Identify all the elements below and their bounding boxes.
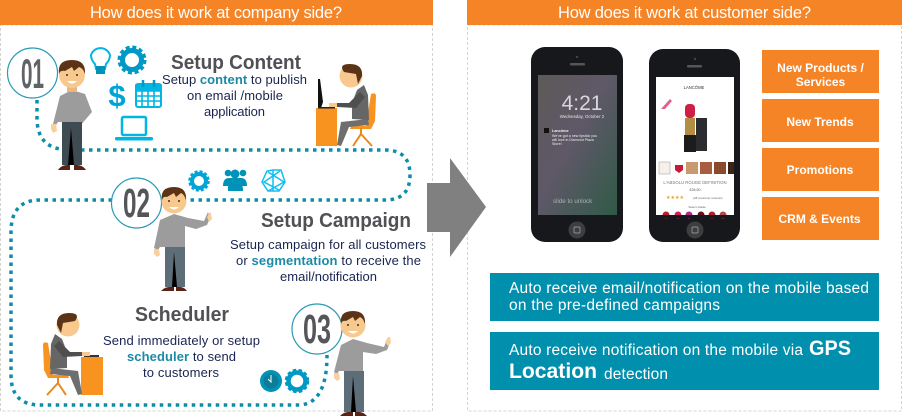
- phone: lock screen: 4:21: [562, 92, 602, 115]
- phone: lock screen: slide to unlock: [553, 198, 593, 205]
- icon: light bulb: [91, 48, 110, 74]
- text: setup campaign: Setup campaign for all customers: [230, 237, 426, 252]
- icon: network hexagon: [262, 170, 285, 191]
- seated person at desk, bottom: [43, 313, 103, 395]
- phone: product page: [649, 49, 740, 242]
- callout: auto receive email: on the pre-defined campaigns: [509, 297, 720, 314]
- text: scheduler: scheduler to send: [127, 349, 236, 364]
- phone: lock screen: We've got a new lipstick you: [552, 134, 597, 138]
- badge 01: 01: [21, 50, 44, 97]
- icon: gear bottom: [286, 370, 308, 392]
- text: setup campaign: [230, 237, 426, 284]
- text: setup campaign: or segmentation to receive the: [236, 253, 421, 268]
- icon: calendar: [136, 80, 161, 107]
- phone: lock screen: Store!: [552, 142, 562, 146]
- text: scheduler: to customers: [143, 365, 220, 380]
- icon: small gear: [190, 172, 208, 190]
- callout: gps location: GPS: [809, 337, 851, 360]
- button: new trends: New Trends: [786, 115, 854, 129]
- text: setup content: Setup content to publish: [162, 72, 307, 87]
- heading: setup content: Setup Content: [171, 52, 301, 74]
- badge 03: 03: [303, 306, 331, 352]
- panel: customer side: [467, 0, 902, 411]
- callout: gps location: Auto receive notification on the mobile via: [509, 342, 803, 359]
- badge 03: [292, 304, 342, 354]
- header: customer side: How does it work at customer side?: [558, 4, 811, 22]
- arrow: [427, 158, 486, 257]
- phone: lock screen: will love in Diamond Plaza: [552, 138, 594, 142]
- heading: setup campaign: Setup Campaign: [261, 210, 411, 232]
- icon: people: [223, 170, 247, 191]
- heading: scheduler: Scheduler: [135, 304, 229, 326]
- badge 02: [112, 178, 162, 228]
- person 2 waving: [154, 187, 212, 291]
- button: new products: New Products /: [777, 61, 865, 75]
- icon: laptop: [115, 117, 153, 140]
- text: setup content: [162, 72, 307, 119]
- person 1 standing: [51, 60, 92, 170]
- button: crm and events: [762, 197, 879, 240]
- button: new products: Services: [796, 75, 846, 89]
- callout: gps location: Location: [509, 360, 597, 383]
- phone: product page: £26.50: [690, 188, 700, 192]
- badge 02: 02: [123, 180, 150, 226]
- icon: gear: [119, 47, 145, 73]
- text: setup content: application: [204, 104, 265, 119]
- phone: lock screen: Wednesday, October 2: [560, 114, 605, 119]
- button: promotions: [762, 148, 879, 191]
- text: setup campaign: email/notification: [280, 269, 377, 284]
- text: setup content: on email /mobile: [187, 88, 283, 103]
- phone: lock screen: [531, 47, 623, 242]
- button: promotions: Promotions: [787, 163, 854, 177]
- phone: lock screen: Lancôme: [552, 129, 569, 133]
- button: new products: [762, 50, 879, 93]
- header: company side: How does it work at company side?: [90, 4, 342, 22]
- phone: product page: L'ABSOLU ROUGE DEFINITION: [663, 180, 727, 185]
- phone: product page: LANCÔME: [684, 85, 705, 90]
- callout: gps location: [490, 332, 879, 390]
- callout: auto receive email: [490, 273, 879, 321]
- phone: product page: (28 customer reviews): [693, 196, 723, 200]
- callout: auto receive email: Auto receive email/notification on the mobile based: [509, 280, 869, 297]
- phone: product page: Select shade: [688, 205, 706, 209]
- phone: product page: ★★★★: [666, 195, 684, 201]
- text: scheduler: Send immediately or setup: [103, 333, 260, 348]
- header: customer side: [467, 0, 902, 25]
- button: new trends: [762, 99, 879, 142]
- button: crm and events: CRM & Events: [778, 212, 861, 226]
- icon: clock: [260, 370, 282, 392]
- seated person at desk, top: [316, 64, 376, 146]
- text: scheduler: [103, 333, 260, 380]
- panel: company side: [0, 0, 433, 411]
- header: company side: [0, 0, 433, 25]
- person 3 waving: [334, 311, 391, 416]
- callout: gps location: detection: [604, 366, 668, 383]
- dotted path: [11, 100, 410, 405]
- icon: dollar: $: [108, 78, 126, 113]
- badge 01: [8, 48, 58, 98]
